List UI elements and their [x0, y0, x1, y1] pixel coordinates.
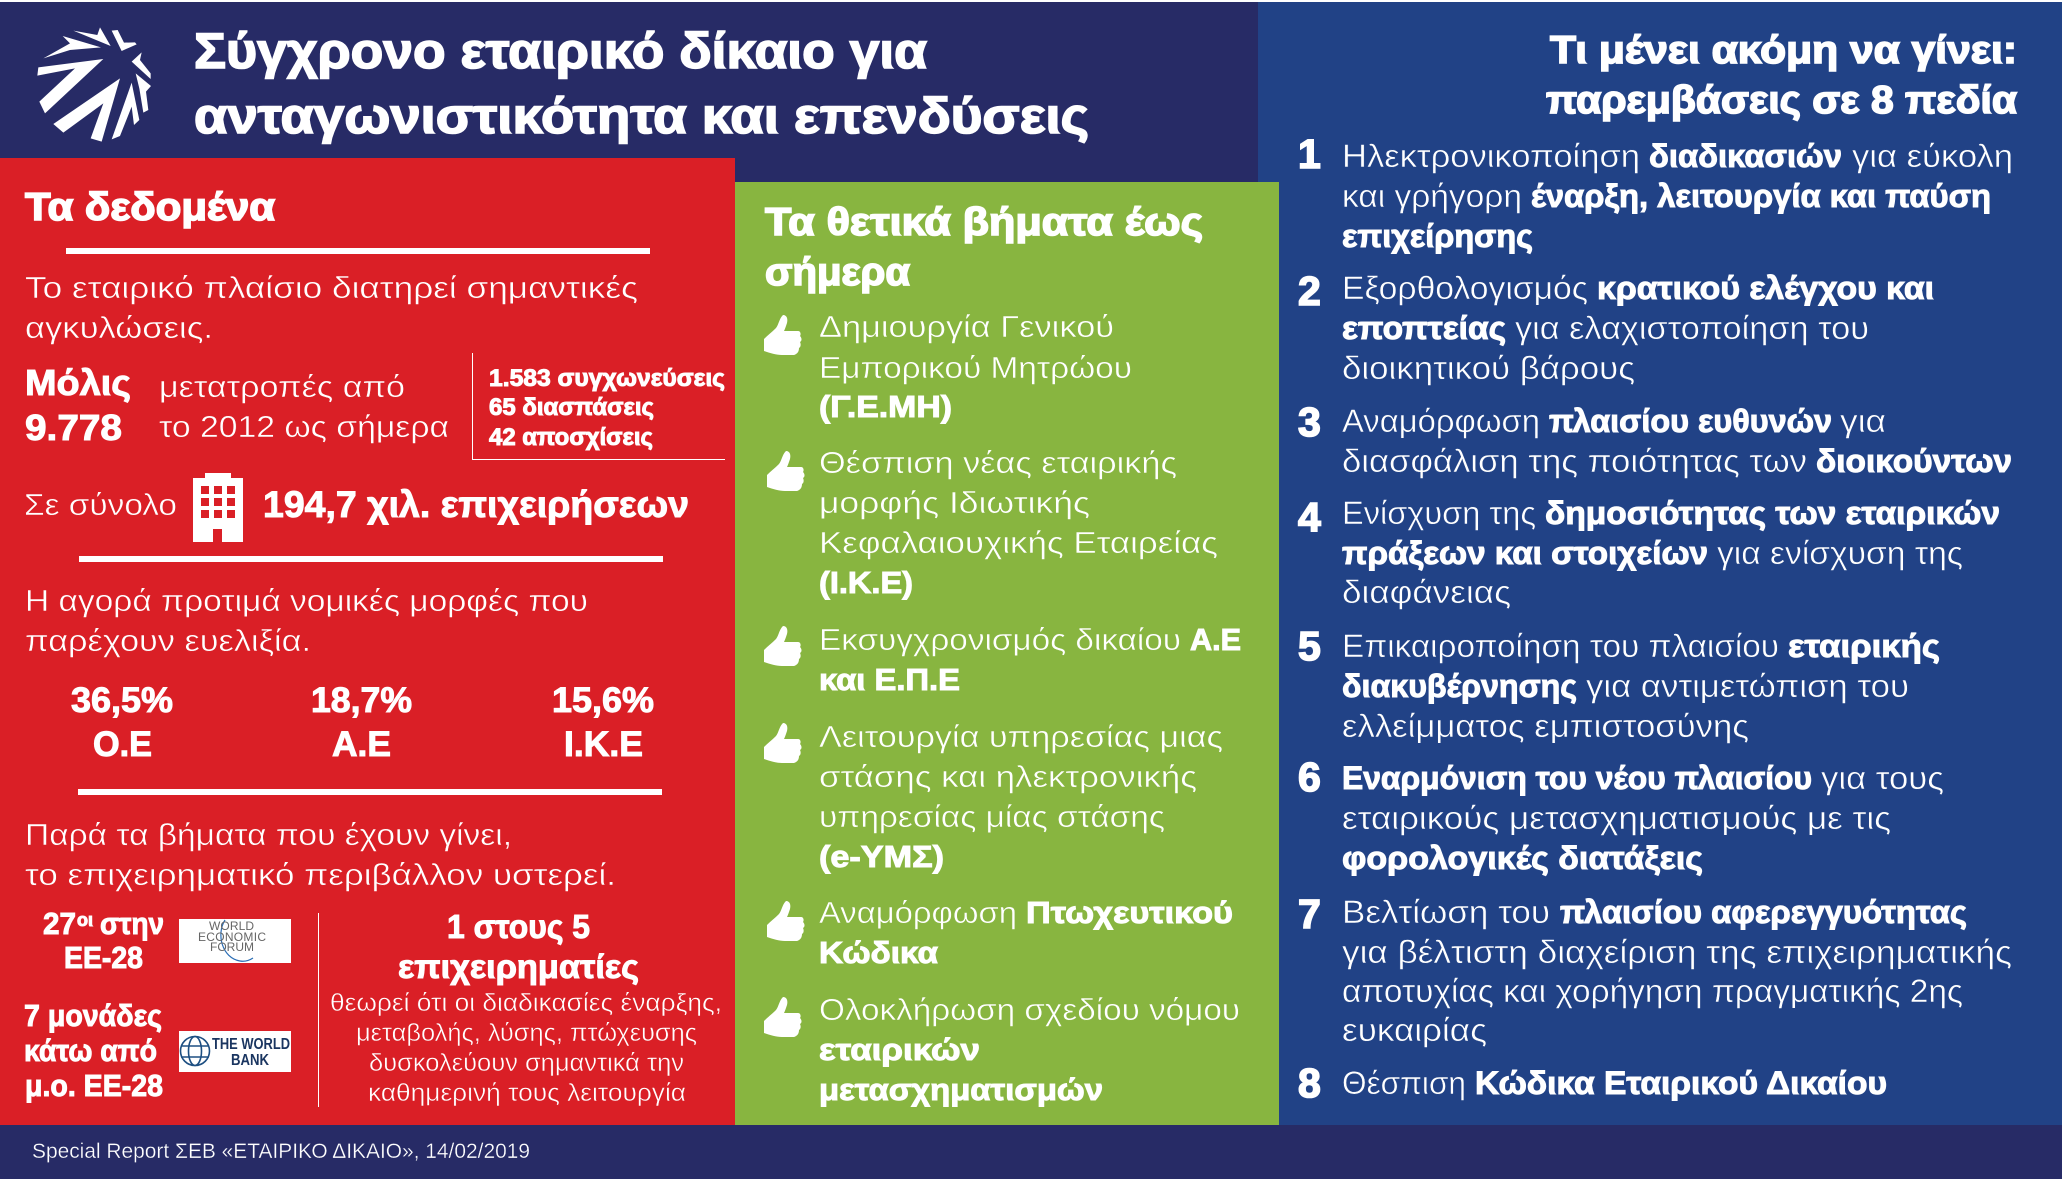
- item 2: διοικητικού βάρους: [1342, 350, 1635, 386]
- item 1: διαδικασιών: [1649, 138, 1842, 174]
- stat: WEF ranking: στην: [100, 906, 164, 941]
- item 2: εποπτείας: [1342, 310, 1506, 346]
- heading: positive steps: Τα θετικά βήματα έως: [765, 201, 1203, 244]
- step 3: και Ε.Π.Ε: [819, 662, 960, 697]
- stat: World Bank ranking: μ.ο. ΕΕ-28: [25, 1068, 163, 1103]
- logo: World Economic Forum: ECONOMIC: [198, 930, 266, 944]
- item 1: Ηλεκτρονικοποίηση: [1342, 138, 1640, 174]
- icon: thumbs up: [767, 451, 804, 491]
- logo: World Bank: BANK: [231, 1052, 269, 1069]
- stat: total companies: [24, 473, 689, 542]
- stat: WEF ranking: 27: [43, 906, 76, 941]
- stat: legal forms: Α.Ε: [332, 725, 391, 764]
- item 7: [1298, 891, 2012, 1048]
- step 1: [764, 309, 1132, 424]
- step 3: Εκσυγχρονισμός δικαίου: [819, 622, 1181, 657]
- stat: 9.778 conversions: 9.778: [25, 407, 122, 448]
- item 4: Ενίσχυση της: [1342, 495, 1536, 531]
- step 1: (Γ.Ε.ΜΗ): [819, 389, 952, 424]
- text: framework: [25, 270, 638, 345]
- step 6: [764, 992, 1240, 1107]
- item 3: διασφάλιση της ποιότητας των: [1342, 443, 1807, 479]
- step 2: [767, 445, 1218, 600]
- icon: building: [193, 473, 243, 542]
- item 7: 7: [1298, 891, 1321, 937]
- item 1: επιχείρησης: [1342, 218, 1533, 254]
- logo: World Economic Forum: FORUM: [210, 940, 254, 954]
- item 7: αποτυχίας και χορήγηση πραγματικής 2ης: [1342, 973, 1963, 1009]
- stat: breakdown: 65 διασπάσεις: [489, 394, 654, 421]
- heading: positive steps: [765, 201, 1203, 294]
- item 1: [1298, 131, 2013, 254]
- icon: SEV logo: [37, 27, 151, 142]
- item 6: εταιρικούς μετασχηματισμούς με τις: [1342, 800, 1891, 836]
- item 7: ευκαιρίας: [1342, 1012, 1487, 1048]
- stat: legal forms: 36,5%: [71, 681, 173, 720]
- callout: 1 in 5 entrepreneurs: καθημερινή τους λειτουργία: [368, 1079, 686, 1107]
- item 8: Θέσπιση: [1342, 1065, 1466, 1101]
- item 4: διαφάνειας: [1342, 574, 1511, 610]
- item 5: ελλείμματος εμπιστοσύνης: [1342, 708, 1749, 744]
- icon: thumbs up: [764, 723, 802, 763]
- stat: breakdown: [489, 365, 725, 451]
- item 6: 6: [1298, 754, 1321, 800]
- item 7: για βέλτιστη διαχείριση της επιχειρηματικής: [1342, 934, 2012, 970]
- stat: 9.778 conversions: το 2012 ως σήμερα: [159, 409, 449, 444]
- text: market preference: [25, 583, 588, 658]
- stat: breakdown: 42 αποσχίσεις: [489, 424, 653, 451]
- step 2: Κεφαλαιουχικής Εταιρείας: [819, 525, 1218, 560]
- stat: breakdown: 1.583 συγχωνεύσεις: [489, 365, 725, 392]
- source note: Special Report ΣΕΒ «ΕΤΑΙΡΙΚΟ ΔΙΚΑΙΟ», 14/02/2019: [32, 1140, 530, 1163]
- title: [194, 23, 1089, 144]
- panel: positive steps: [735, 182, 1279, 1125]
- title: ανταγωνιστικότητα και επενδύσεις: [194, 88, 1089, 144]
- step 4: στάσης και ηλεκτρονικής: [819, 759, 1197, 794]
- item 3: Αναμόρφωση: [1342, 403, 1540, 439]
- step 6: εταιρικών: [819, 1032, 980, 1067]
- callout: 1 in 5 entrepreneurs: θεωρεί ότι οι διαδικασίες έναρξης,: [330, 989, 722, 1017]
- logo: World Economic Forum: [179, 919, 291, 963]
- item 6: φορολογικές διατάξεις: [1342, 840, 1703, 876]
- item 4: για ενίσχυση της: [1717, 535, 1963, 571]
- icon: thumbs up: [767, 901, 804, 941]
- callout: 1 in 5 entrepreneurs: μεταβολής, λύσης, πτώχευσης: [356, 1019, 697, 1047]
- item 7: πλαισίου αφερεγγυότητας: [1560, 894, 1967, 930]
- text: environment lags: [25, 817, 616, 892]
- item 4: δημοσιότητας των εταιρικών: [1545, 495, 2000, 531]
- item 4: [1298, 494, 2000, 610]
- stat: World Bank ranking: 7 μονάδες: [24, 998, 162, 1033]
- stat: total companies: 194,7 χιλ. επιχειρήσεων: [263, 484, 689, 525]
- item 6: [1298, 754, 1944, 876]
- item 5: διακυβέρνησης: [1342, 668, 1577, 704]
- step 4: Λειτουργία υπηρεσίας μιας: [819, 719, 1223, 754]
- step 2: Θέσπιση νέας εταιρικής: [819, 445, 1177, 480]
- icon: thumbs up: [764, 315, 802, 355]
- icon: thumbs up: [764, 626, 802, 666]
- callout: 1 in 5 entrepreneurs: δυσκολεύουν σημαντικά την: [369, 1049, 684, 1077]
- item 1: και γρήγορη: [1342, 178, 1522, 214]
- stat: 9.778 conversions: Μόλις: [25, 362, 131, 403]
- logo: World Bank: [179, 1031, 291, 1072]
- item 3: πλαισίου ευθυνών: [1549, 403, 1832, 439]
- step 1: Δημιουργία Γενικού: [819, 309, 1114, 344]
- item 8: 8: [1298, 1060, 1321, 1106]
- step 5: Αναμόρφωση: [819, 895, 1017, 930]
- stat: legal forms: Ο.Ε: [93, 725, 152, 764]
- step 2: (Ι.Κ.Ε): [819, 565, 913, 600]
- text: framework: αγκυλώσεις.: [25, 310, 213, 345]
- item 6: για τους: [1821, 760, 1944, 796]
- text: market preference: Η αγορά προτιμά νομικές μορφές που: [25, 583, 588, 618]
- step 4: (e-ΥΜΣ): [819, 839, 944, 874]
- logo: World Bank: THE WORLD: [212, 1036, 290, 1053]
- item 4: πράξεων και στοιχείων: [1342, 535, 1708, 571]
- text: framework: Το εταιρικό πλαίσιο διατηρεί σημαντικές: [25, 270, 638, 305]
- item 6: Εναρμόνιση του νέου πλαισίου: [1342, 760, 1812, 796]
- stat: 9.778 conversions: [25, 362, 449, 448]
- item 5: εταιρικής: [1788, 628, 1940, 664]
- icon: thumbs up: [764, 997, 802, 1037]
- logo: World Economic Forum: WORLD: [209, 919, 254, 933]
- stat: World Bank ranking: κάτω από: [24, 1033, 157, 1068]
- title: Σύγχρονο εταιρικό δίκαιο για: [194, 23, 927, 79]
- stat: legal forms: [71, 681, 654, 764]
- item 5: 5: [1298, 623, 1321, 669]
- item 5: για αντιμετώπιση του: [1586, 668, 1909, 704]
- item 1: για εύκολη: [1852, 138, 2013, 174]
- stat: legal forms: 18,7%: [311, 681, 412, 720]
- item 1: 1: [1298, 131, 1321, 177]
- step 5: [767, 895, 1233, 970]
- heading: positive steps: σήμερα: [765, 251, 910, 294]
- item 1: έναρξη, λειτουργία και παύση: [1531, 178, 1991, 214]
- heading: interventions: [1546, 29, 2017, 122]
- item 5: [1298, 623, 1940, 744]
- stat: WEF ranking: οι: [77, 910, 93, 930]
- heading: the data: Τα δεδομένα: [25, 186, 275, 229]
- step 3: Α.Ε: [1190, 622, 1241, 657]
- item 5: Επικαιροποίηση του πλαισίου: [1342, 628, 1779, 664]
- stat: legal forms: Ι.Κ.Ε: [564, 725, 643, 764]
- header band: [0, 2, 1260, 184]
- step 3: [764, 622, 1241, 697]
- callout: 1 in 5 entrepreneurs: [330, 908, 722, 1107]
- step 2: μορφής Ιδιωτικής: [819, 485, 1090, 520]
- item 2: Εξορθολογισμός: [1342, 270, 1588, 306]
- heading: interventions: Τι μένει ακόμη να γίνει:: [1550, 29, 2017, 72]
- stat: total companies: Σε σύνολο: [24, 487, 177, 522]
- step 4: υπηρεσίας μίας στάσης: [819, 799, 1165, 834]
- text: environment lags: το επιχειρηματικό περιβάλλον υστερεί.: [25, 857, 616, 892]
- stat: World Bank ranking: [24, 998, 163, 1103]
- text: market preference: παρέχουν ευελιξία.: [25, 623, 311, 658]
- item 3: για: [1840, 403, 1886, 439]
- step 4: [764, 719, 1223, 874]
- stat: 9.778 conversions: μετατροπές από: [159, 369, 405, 404]
- item 2: κρατικού ελέγχου και: [1597, 270, 1934, 306]
- stat: WEF ranking: [43, 906, 164, 975]
- panel: the data: [0, 158, 735, 1125]
- item 7: Βελτίωση του: [1342, 894, 1550, 930]
- item 2: για ελαχιστοποίηση του: [1515, 310, 1869, 346]
- step 6: Ολοκλήρωση σχεδίου νόμου: [819, 992, 1240, 1027]
- item 2: 2: [1298, 268, 1321, 314]
- step 1: Εμπορικού Μητρώου: [819, 350, 1132, 385]
- item 3: [1298, 399, 2012, 479]
- item 8: [1298, 1060, 1887, 1106]
- item 3: 3: [1298, 399, 1321, 445]
- item 4: 4: [1298, 494, 1321, 540]
- step 5: Πτωχευτικού: [1026, 895, 1233, 930]
- text: environment lags: Παρά τα βήματα που έχουν γίνει,: [25, 817, 512, 852]
- callout: 1 in 5 entrepreneurs: επιχειρηματίες: [398, 948, 639, 985]
- item 8: Κώδικα Εταιρικού Δικαίου: [1475, 1065, 1887, 1101]
- step 5: Κώδικα: [819, 935, 938, 970]
- panel: interventions: [1258, 2, 2062, 1125]
- heading: interventions: παρεμβάσεις σε 8 πεδία: [1546, 79, 2017, 122]
- item 2: [1298, 268, 1934, 386]
- footer: [0, 1125, 2062, 1179]
- step 6: μετασχηματισμών: [819, 1072, 1103, 1107]
- stat: WEF ranking: ΕΕ-28: [64, 940, 143, 975]
- callout: 1 in 5 entrepreneurs: 1 στους 5: [447, 908, 590, 945]
- stat: legal forms: 15,6%: [552, 681, 654, 720]
- item 3: διοικούντων: [1816, 443, 2012, 479]
